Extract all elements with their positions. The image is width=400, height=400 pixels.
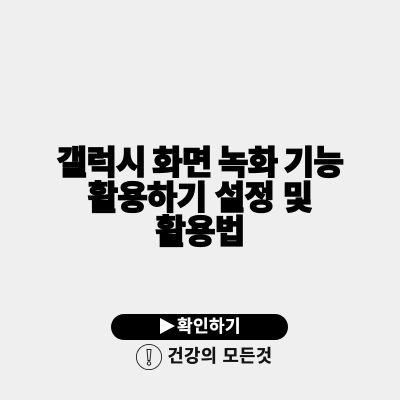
title: 활용법: [156, 213, 244, 250]
caption: 건강의 모든것: [168, 346, 272, 366]
icon: exclamation circle: [136, 344, 162, 370]
title: 갤럭시 화면 녹화 기능: [57, 144, 343, 181]
title: 활용하기 설정 및: [88, 178, 312, 216]
button: confirm: [111, 314, 288, 340]
icon: play triangle: [160, 318, 175, 334]
button label: 확인하기: [177, 317, 241, 336]
title: [56, 144, 344, 250]
